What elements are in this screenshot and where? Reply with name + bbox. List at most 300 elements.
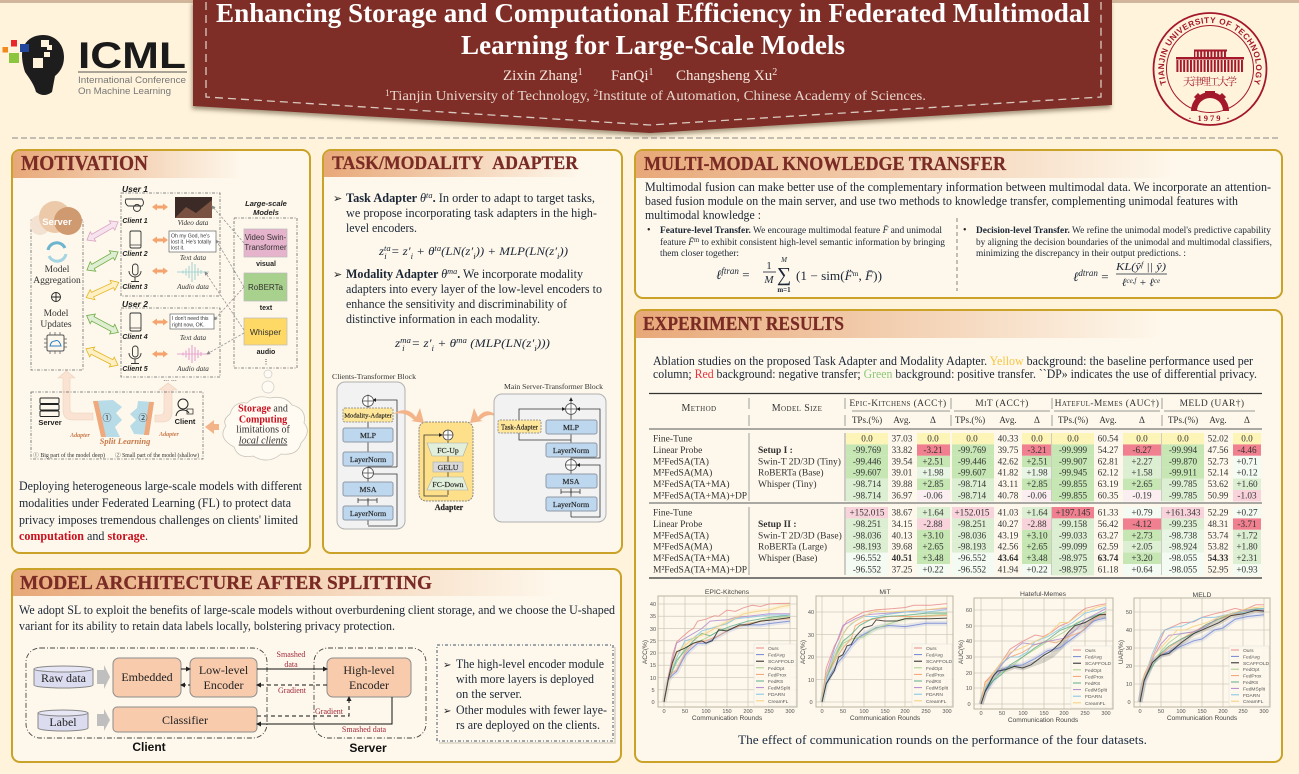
formula: modality adapter: i <box>534 344 537 353</box>
row: TA+MA+DP setup II: M²FedSA(TA+MA)+DP <box>653 564 747 576</box>
decision-level transfer <box>963 225 1272 259</box>
label cylinder <box>38 710 88 731</box>
intro text: multimodal knowledge : <box>645 208 761 222</box>
callout: deployment notes: with more layers is deployed <box>456 672 595 686</box>
formula: task adapter: i <box>557 252 559 261</box>
row: TA+MA setup I: -98.714 <box>853 479 882 489</box>
legend: MELD: FedAvg <box>1243 654 1260 660</box>
legend: EPIC-Kitchens: Ours <box>768 646 779 652</box>
chart: MELD: 10 <box>1126 682 1132 688</box>
heading: task/modality adapter: TASK/MODALITY ADAPTER <box>332 154 579 174</box>
chart: EPIC-Kitchens: 10 <box>650 676 656 682</box>
high-level encoder box: Encoder <box>349 678 389 692</box>
legend: MiT: FedMSplit <box>926 686 949 692</box>
split learning box: Adapter <box>69 433 90 439</box>
intro text: Multimodal fusion can make better use of the complementary information between multimodal data. We incorporate an attention- <box>645 180 1271 194</box>
legend: Hateful-Memes <box>1071 646 1112 708</box>
row: TA+MA+DP setup I: -0.19 <box>1132 490 1152 500</box>
body text: motivation: modalities under Federated Learning (FL) to protect data <box>19 496 291 510</box>
chart: MiT: 300 <box>942 709 952 715</box>
row: TA+MA+DP setup II: +0.64 <box>1131 564 1153 574</box>
row: TA+MA setup I <box>653 479 1261 490</box>
row: TA+MA setup II: 63.74 <box>1098 553 1119 563</box>
row: fine-tune setup II: 61.33 <box>1098 508 1119 518</box>
formula: modality adapter: ))) <box>536 336 550 350</box>
logo: university seal <box>1152 12 1268 126</box>
chart: EPIC-Kitchens: 15 <box>650 663 656 669</box>
chart: Hateful-Memes: 20 <box>966 671 972 677</box>
row: TA+MA+DP setup II: -98.975 <box>1059 564 1088 574</box>
chart: Hateful-Memes: 40 <box>966 639 972 645</box>
server column: Server <box>42 217 72 228</box>
table rules and header: Hateful-Memes (AUC†) <box>1055 398 1159 409</box>
row: fine-tune setup I: 0.0 <box>1241 434 1253 444</box>
diagram: clients transformer block: Modality-Adapter <box>344 412 393 420</box>
legend text: column; Red background: negative transfer; Green background: positive transfer. ``DP» indicates the use of differential privacy. <box>653 367 1257 381</box>
row: TA+MA setup I: +2.85 <box>922 479 944 489</box>
row: TA+MA setup II: +3.48 <box>1026 553 1048 563</box>
legend: Hateful-Memes: FedAvg <box>1085 655 1102 661</box>
diagram: main server transformer block: MSA <box>563 477 580 486</box>
row: TA setup II: -98.738 <box>1169 530 1198 540</box>
legend: Hateful-Memes: FedOpt <box>1085 668 1102 674</box>
legend: MELD: FedMSplit <box>1243 686 1266 692</box>
row: TA+MA setup I: 53.62 <box>1208 479 1229 489</box>
diagram: adapter: FC-Down <box>432 480 464 489</box>
chart: Hateful-Memes: Hateful-Memes <box>1020 591 1067 598</box>
arrow: cloud to split box <box>205 420 219 434</box>
user 2 group: Client 4 <box>122 334 148 341</box>
text: modality adapter: . <box>457 267 460 281</box>
row: fine-tune setup I: Fine-Tune <box>653 434 692 444</box>
legend: MELD: FedProx <box>1243 674 1262 680</box>
formula: feature transfer <box>716 256 882 294</box>
legend: EPIC-Kitchens: SCAFFOLD <box>768 659 795 665</box>
callout: deployment notes: on the server. <box>456 687 522 701</box>
chart: Hateful-Memes: 0 <box>979 711 983 717</box>
row: TA+MA+DP setup II: 41.94 <box>998 564 1019 574</box>
logo: ICML <box>2 35 187 97</box>
row: TA setup II: +2.73 <box>1131 530 1153 540</box>
chart: Hateful-Memes: AUC(%) <box>958 640 965 664</box>
formula: task adapter: = z′ <box>391 244 411 258</box>
table rules and header: Model Size <box>772 403 822 414</box>
row: TA+MA setup II: 54.33 <box>1208 553 1229 563</box>
chart: MiT: 30 <box>808 633 814 639</box>
legend: MiT <box>912 644 953 706</box>
split learning box: ... ... <box>163 376 177 383</box>
authors: Changsheng Xu <box>676 68 772 84</box>
row: linear probe setup II: -2.88 <box>923 519 943 529</box>
chart: Hateful-Memes: 200 <box>1059 711 1069 717</box>
split learning box: Server <box>38 418 62 427</box>
row: TA+MA+DP setup I: -0.06 <box>923 490 943 500</box>
user 1 group: Text data <box>180 254 207 262</box>
row: linear probe setup I: -4.46 <box>1237 445 1257 455</box>
caption: The effect of communication rounds on the performance of the four datasets. <box>738 732 1147 747</box>
table rules and header: Avg. <box>1099 415 1117 425</box>
formula: modality adapter: ma <box>400 336 411 345</box>
user 1 group: User 1 <box>122 184 148 194</box>
table rules and header: Δ <box>1034 415 1040 425</box>
callout: deployment notes: rs are deployed on the clients. <box>456 718 600 732</box>
formula: decision transfer: ce <box>1154 277 1160 285</box>
row: linear probe setup I <box>653 444 1261 456</box>
row: TA setup I: -99.870 <box>1169 456 1198 466</box>
panel: task/modality adapter <box>323 150 622 553</box>
row: TA+MA setup I: Whisper (Tiny) <box>758 479 816 490</box>
formula: task adapter: (LN(z′ <box>441 244 474 258</box>
chart: EPIC-Kitchens: 50 <box>682 709 688 715</box>
legend text: Ablation studies on the proposed Task Adapter and Modality Adapter. Yellow background: the baseline performance used per <box>653 354 1254 368</box>
chart: EPIC-Kitchens: EPIC-Kitchens <box>705 589 750 596</box>
chart: MiT: 10 <box>808 678 814 684</box>
embedded box: Embedded <box>121 670 173 684</box>
flow arrows <box>181 669 392 724</box>
row: fine-tune setup I: 0.0 <box>1031 434 1043 444</box>
row: fine-tune setup I: 40.33 <box>998 434 1019 444</box>
row: TA+MA+DP setup II: -96.552 <box>958 564 987 574</box>
row: linear probe setup II: -98.251 <box>958 519 987 529</box>
row: linear probe setup I: Linear Probe <box>653 446 702 456</box>
row: MA setup I: -99.911 <box>1169 468 1197 478</box>
user 1 group: lost it. He's totally <box>171 240 212 246</box>
legend: EPIC-Kitchens: FDARN <box>768 692 785 698</box>
row: linear probe setup I: -99.769 <box>853 445 882 455</box>
row: linear probe setup I: -99.769 <box>958 445 987 455</box>
legend: Hateful-Memes: FedProx <box>1085 674 1104 680</box>
chart: EPIC-Kitchens: 300 <box>785 709 795 715</box>
chart: Hateful-Memes: Communication Rounds <box>1008 717 1079 724</box>
chart: EPIC-Kitchens <box>642 589 797 722</box>
row: TA+MA+DP setup I: 36.97 <box>892 490 913 500</box>
user 2 group: Client 5 <box>122 366 148 373</box>
row: linear probe setup II: -99.158 <box>1059 519 1088 529</box>
user 1 group: Audio data <box>176 283 209 291</box>
row: TA+MA setup II: +3.48 <box>922 553 944 563</box>
split learning box: ① Big part of the model deep) <box>33 451 105 459</box>
row: MA setup II <box>653 541 1261 553</box>
large-scale models column: ⋮ <box>262 359 270 366</box>
chart: EPIC-Kitchens: 250 <box>764 709 774 715</box>
chart: EPIC-Kitchens: 40 <box>650 602 656 608</box>
classifier box <box>113 707 257 732</box>
chart: Hateful-Memes: 0 <box>967 702 971 708</box>
row: TA setup II: +1.72 <box>1236 530 1258 540</box>
row: TA+MA setup I: -98.714 <box>958 479 987 489</box>
row: TA+MA+DP setup I: 50.99 <box>1208 490 1229 500</box>
decision-level transfer: by aligning the decision boundaries of the unimodal and multimodal classifiers, <box>976 237 1272 248</box>
panel: motivation <box>12 150 310 553</box>
table rules and header: Δ <box>1139 415 1145 425</box>
row: fine-tune setup II: +152.015 <box>954 508 990 518</box>
table rules and header: Δ <box>1244 415 1250 425</box>
row: TA setup II: 63.27 <box>1098 530 1119 540</box>
row: MA setup I: RoBERTa (Base) <box>758 468 824 479</box>
heading: multi-modal knowledge transfer: MULTI-MODAL KNOWLEDGE TRANSFER <box>644 153 1007 175</box>
divider <box>956 218 958 291</box>
formula: decision transfer: || ŷ) <box>1143 261 1166 273</box>
text: modality adapter: ma <box>447 266 457 276</box>
chart: MELD: 30 <box>1126 646 1132 652</box>
heading: experiment results: EXPERIMENT RESULTS <box>643 313 844 335</box>
authors: 1 <box>648 67 654 78</box>
chart: Hateful-Memes <box>958 591 1113 724</box>
large-scale models column <box>234 199 297 368</box>
chart: Hateful-Memes: 50 <box>999 711 1005 717</box>
row: TA+MA+DP setup II: +0.22 <box>922 564 944 574</box>
high-level encoder box <box>327 658 411 697</box>
split learning box: ② <box>138 413 148 423</box>
table rules and header: Avg. <box>999 415 1017 425</box>
row: fine-tune setup I: 37.03 <box>892 434 913 444</box>
chart: MELD: MELD <box>1193 592 1212 599</box>
formula: task adapter: i <box>411 252 413 261</box>
row: fine-tune setup I: 0.0 <box>1177 434 1189 444</box>
row: TA+MA setup I: M²FedSA(TA+MA) <box>653 479 730 490</box>
feature-level transfer: Feature-level Transfer. We encourage multimodal feature F̄ and unimodal <box>660 225 942 236</box>
row: TA setup I: +2.51 <box>1026 456 1048 466</box>
diagram: u-shaped split <box>26 648 426 755</box>
row: linear probe setup II: 56.42 <box>1098 519 1119 529</box>
low-level encoder box: Encoder <box>204 678 243 692</box>
low-level encoder box: Low-level <box>199 663 249 677</box>
row: TA+MA setup II: +3.20 <box>1131 553 1153 563</box>
chart: MELD: 250 <box>1238 709 1248 715</box>
row: linear probe setup I: -99.999 <box>1059 445 1088 455</box>
row: MA setup II: M²FedSA(MA) <box>653 542 712 553</box>
formula: feature transfer: m=1 <box>777 286 791 294</box>
large-scale models column: RoBERTa <box>248 283 284 292</box>
row: MA setup I: 39.01 <box>892 468 913 478</box>
client and server labels <box>132 740 387 755</box>
authors: 1 <box>578 67 583 78</box>
decision-level transfer: • <box>963 225 967 236</box>
arrow labels <box>277 650 387 734</box>
dashed mapping arrows <box>205 206 244 354</box>
legend text <box>653 354 1257 381</box>
row: TA+MA+DP setup II: -96.552 <box>853 564 882 574</box>
chart: MELD: 100 <box>1176 709 1186 715</box>
row: MA setup II: -98.924 <box>1169 542 1198 552</box>
row: TA+MA setup I: 63.19 <box>1098 479 1119 489</box>
legend: MELD: FedOpt <box>1243 667 1260 673</box>
row: linear probe setup II: -99.235 <box>1169 519 1198 529</box>
row: TA+MA setup I: 43.11 <box>998 479 1019 489</box>
chart: Hateful-Memes: 300 <box>1101 711 1111 717</box>
table rules and header: Δ <box>930 415 936 425</box>
callout: deployment notes: Other modules with fewer laye- <box>456 703 607 717</box>
title banner <box>193 0 1112 133</box>
row: TA setup I: 42.62 <box>998 456 1019 466</box>
large-scale models column: Whisper <box>250 327 281 337</box>
split learning box: Adapter <box>158 432 179 438</box>
callout: deployment notes <box>437 645 615 743</box>
chart: MiT: 200 <box>900 709 910 715</box>
legend: Hateful-Memes: FedMSplit <box>1085 688 1108 694</box>
formula: modality adapter: i <box>402 344 405 353</box>
feature-level transfer: • <box>647 225 651 236</box>
formula: task adapter: ta <box>434 244 441 253</box>
row: TA+MA+DP setup I: -1.03 <box>1237 490 1257 500</box>
row: fine-tune setup I: 0.0 <box>966 434 978 444</box>
large-scale models column: Video Swin- <box>245 233 287 242</box>
split learning box: ① <box>102 413 112 423</box>
formula: feature transfer: M <box>763 274 774 286</box>
feature-level transfer: to exhibit consistent high-level semantic information by bringing <box>699 237 945 248</box>
row: fine-tune setup I: 52.02 <box>1208 434 1229 444</box>
legend: MiT: SCAFFOLD <box>926 659 953 665</box>
raw data cylinder: Raw data <box>41 671 87 685</box>
legend: MELD: FedRS <box>1243 680 1259 686</box>
affiliations: 2 <box>594 88 598 98</box>
row: MA setup I: 41.82 <box>998 468 1019 478</box>
split learning box: Split Learning <box>100 436 151 446</box>
row: MA setup II: +2.65 <box>1026 542 1048 552</box>
formula: feature transfer: ftran <box>721 266 739 276</box>
arrow: modality adapter to adapter <box>393 408 424 423</box>
high-level encoder box: High-level <box>343 663 395 677</box>
row: linear probe setup I: Setup I : <box>758 446 793 456</box>
row: TA+MA+DP setup II <box>653 564 1261 576</box>
user 2 group: Text data <box>180 334 207 342</box>
diagram: main server transformer block: Main Server-Transformer Block <box>504 382 603 391</box>
affiliations: Institute of Automation, Chinese Academy of Sciences. <box>598 89 926 104</box>
row: TA+MA+DP setup I: M²FedSA(TA+MA)+DP <box>653 490 747 502</box>
row: TA+MA setup II: M²FedSA(TA+MA) <box>653 553 730 564</box>
row: TA+MA setup II: -96.552 <box>958 553 987 563</box>
formula: feature transfer: , <box>858 269 865 283</box>
row: linear probe setup I: -3.21 <box>1027 445 1047 455</box>
formula: decision transfer: ce,f <box>1126 277 1137 285</box>
row: TA+MA setup I: -99.855 <box>1059 479 1088 489</box>
formula: modality adapter: ma <box>456 336 467 345</box>
large-scale models column: text <box>260 305 273 312</box>
embedded box <box>113 658 181 697</box>
row: fine-tune setup I <box>653 433 1261 444</box>
chart: MELD: 200 <box>1218 709 1228 715</box>
row: TA+MA setup II: 43.64 <box>998 553 1019 563</box>
user 2 group <box>121 299 220 377</box>
diagram: main server transformer block: Task-Adapter <box>501 424 539 432</box>
row: MA setup II: -99.099 <box>1059 542 1088 552</box>
chart: EPIC-Kitchens: 100 <box>701 709 711 715</box>
user 2 group: User 2 <box>122 299 148 309</box>
large-scale models column: Transformer <box>244 243 287 252</box>
chart: EPIC-Kitchens: 35 <box>650 614 656 620</box>
row: TA setup I: +2.27 <box>1131 456 1153 466</box>
row: fine-tune setup II: +152.015 <box>849 508 885 518</box>
callout: storage limitations cloud <box>223 370 307 460</box>
legend: MiT: FDARN <box>926 692 943 698</box>
legend: MELD: SCAFFOLD <box>1243 661 1270 667</box>
row: TA+MA setup I: +2.65 <box>1131 479 1153 489</box>
row: TA setup I: -99.446 <box>958 456 987 466</box>
body text: model architecture <box>19 603 616 633</box>
formula: feature transfer: ℓ <box>716 267 721 282</box>
split learning box: ② Small part of the model (shallow) <box>115 451 199 459</box>
row: TA+MA+DP setup I: -98.714 <box>853 490 882 500</box>
legend: EPIC-Kitchens: FedRS <box>768 679 784 685</box>
row: TA+MA+DP setup II: 37.25 <box>892 564 913 574</box>
row: TA+MA+DP setup I: -99.785 <box>1169 490 1198 500</box>
row: TA setup I <box>653 456 1261 467</box>
diagram: clients transformer block: Clients-Transformer Block <box>332 372 416 381</box>
chart: MiT: 20 <box>808 655 814 661</box>
text: modality adapter: ➢ <box>333 269 342 281</box>
row: TA setup II: +3.10 <box>922 530 944 540</box>
row: fine-tune setup II: +0.79 <box>1131 508 1153 518</box>
row: TA setup I: M²FedSA(TA) <box>653 456 709 467</box>
text: task adapter: level encoders. <box>346 221 417 235</box>
formula: modality adapter: (MLP(LN(z′ <box>467 336 535 350</box>
chart: MiT: 100 <box>859 709 869 715</box>
row: TA setup I: +0.71 <box>1236 456 1258 466</box>
table rules and header: TPs.(%) <box>1058 415 1088 425</box>
federated double arrows <box>83 217 121 370</box>
chart: MELD: 0 <box>1127 700 1131 706</box>
formula: modality adapter: = z′ <box>411 336 432 350</box>
row: MA setup II: +2.05 <box>1131 542 1153 552</box>
body text: motivation: computation and storage. <box>19 529 148 543</box>
diagram: clients transformer block: LayerNorm <box>350 509 386 518</box>
chart: MiT: 250 <box>921 709 931 715</box>
intro text: based fusion module on the main server, and use two methods to knowledge transfer, complementing unimodal features with <box>645 194 1239 208</box>
row: TA+MA setup II: -98.975 <box>1059 553 1088 563</box>
chart: MiT: ACC(%) <box>800 640 807 664</box>
row: linear probe setup II <box>653 518 1261 530</box>
heading: model architecture: MODEL ARCHITECTURE AFTER SPLITTING <box>20 572 432 594</box>
row: MA setup I: +0.12 <box>1236 468 1258 478</box>
chart: MiT: 50 <box>840 709 846 715</box>
title: Learning for Large-Scale Models <box>461 30 845 60</box>
chart: EPIC-Kitchens: 5 <box>651 688 655 694</box>
row: MA setup I: -99.607 <box>853 468 882 478</box>
arrow labels: Gradient <box>315 707 344 716</box>
formula: feature transfer: M <box>780 256 788 264</box>
arrow labels: Smashed data <box>342 725 387 734</box>
formula: decision transfer: + ℓ <box>1136 277 1154 289</box>
chart: MELD: 0 <box>1138 709 1142 715</box>
chart: EPIC-Kitchens: 25 <box>650 639 656 645</box>
diagram: adapter: GELU <box>438 463 459 472</box>
authors <box>503 67 777 84</box>
text: modality adapter: Modality Adapter θ <box>346 267 447 281</box>
row: linear probe setup II: -2.88 <box>1027 519 1047 529</box>
diagram: clients transformer block: LayerNorm <box>350 455 386 464</box>
formula: decision transfer: dtran <box>1078 268 1098 278</box>
authors: 2 <box>772 67 777 78</box>
row: TA setup I: 62.81 <box>1098 456 1119 466</box>
affiliations: 1 <box>385 88 390 98</box>
chart: Hateful-Memes: 30 <box>966 655 972 661</box>
formula: task adapter: )) <box>558 244 568 258</box>
legend: EPIC-Kitchens: FedMSplit <box>768 686 791 692</box>
row: TA setup I: Swin-T 2D/3D (Tiny) <box>758 456 841 467</box>
chart: Hateful-Memes: 250 <box>1080 711 1090 717</box>
chart: EPIC-Kitchens: 0 <box>651 700 655 706</box>
formula: decision transfer: KL(ŷ <box>1116 261 1138 273</box>
row: fine-tune setup II <box>653 507 1261 518</box>
callout: storage limitations cloud: Storage and <box>238 404 288 414</box>
row: TA setup I: +2.51 <box>922 456 944 466</box>
row: linear probe setup I: 39.75 <box>998 445 1019 455</box>
callout: storage limitations cloud: Computing <box>239 414 287 426</box>
body text: motivation: privacy imposes tremendous challenges on clients' limited <box>19 513 299 527</box>
formula: modality adapter: z <box>395 336 400 350</box>
chart: EPIC-Kitchens: 0 <box>662 709 666 715</box>
row: TA+MA setup II: -98.055 <box>1169 553 1198 563</box>
